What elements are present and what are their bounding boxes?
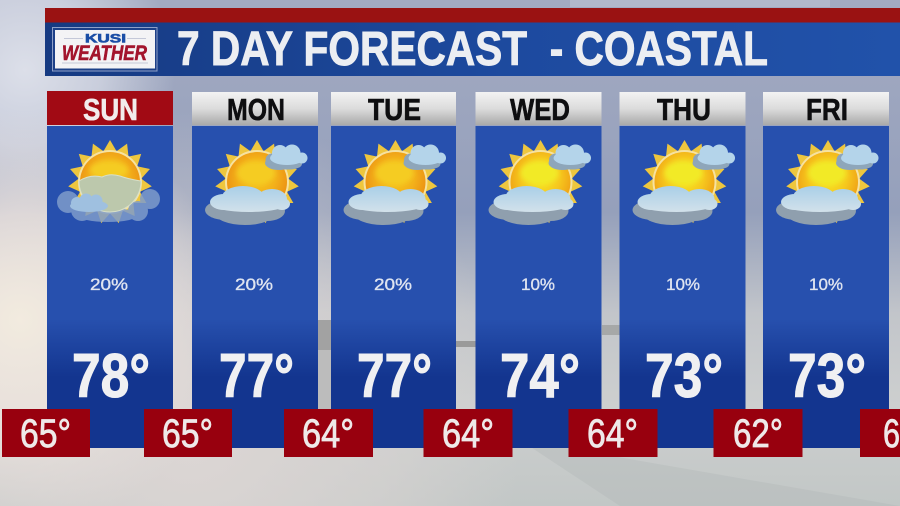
- panel: Friday: FRI: [806, 92, 848, 127]
- precipitation chance: 10%: [521, 275, 555, 294]
- panel: Sunday: [47, 91, 173, 448]
- low temperature: 65: 65°: [162, 412, 213, 456]
- day header: [763, 92, 889, 125]
- low temperature: 65: [144, 409, 232, 457]
- precipitation chance: 10%: [809, 275, 843, 294]
- low temperature: 62: [714, 409, 802, 457]
- day header: [47, 91, 173, 125]
- low temperature: 64: 64°: [587, 412, 638, 456]
- precipitation chance: 10%: [666, 275, 700, 294]
- precipitation chance: 20%: [90, 275, 128, 294]
- logo: KUSI Weather: KUSI: [85, 34, 126, 46]
- low temperature: 62: 62°: [733, 412, 783, 456]
- day header: [192, 92, 318, 125]
- forecast body: [47, 126, 173, 448]
- forecast body: [192, 126, 318, 448]
- title bar: [45, 8, 900, 76]
- low temperature: 64: [424, 409, 512, 457]
- forecast body: [331, 126, 456, 448]
- low temperature: 64: [568, 409, 658, 457]
- low temperature: 64: [284, 409, 373, 457]
- panel: Wednesday: WED: [510, 92, 570, 127]
- icon: sun behind translucent clouds: [57, 140, 160, 225]
- high temperature: 78°: [72, 342, 150, 411]
- low temperature: clipped at edge: [860, 409, 900, 457]
- logo: KUSI Weather: WEATHER: [62, 42, 148, 65]
- precipitation chance: 20%: [235, 275, 273, 294]
- day header: [476, 92, 602, 125]
- day header: [331, 92, 456, 125]
- low temperature: 64: 64°: [442, 412, 494, 456]
- icon: partly cloudy: [205, 140, 308, 225]
- icon: partly cloudy: [344, 140, 446, 225]
- high temperature: 77°: [357, 342, 432, 411]
- blue title band: [45, 22, 900, 76]
- day header: [620, 92, 746, 125]
- icon: partly cloudy: [632, 140, 735, 225]
- panel: Wednesday: [476, 92, 602, 448]
- panel: Tuesday: [331, 92, 456, 448]
- high temperature: 73°: [788, 342, 866, 411]
- panel: Monday: [192, 92, 318, 448]
- title text: 7 DAY FORECAST - COASTAL: [177, 23, 768, 76]
- low temperature: 65: [2, 409, 90, 457]
- low temperature: 65: 65°: [20, 412, 71, 456]
- high temperature: 73°: [645, 342, 723, 411]
- forecast body: [476, 126, 602, 448]
- high temperature: 74°: [500, 342, 580, 411]
- panel: Thursday: THU: [657, 92, 711, 127]
- icon: partly cloudy: [776, 140, 878, 225]
- panel: Thursday: [620, 92, 746, 448]
- panel: Tuesday: TUE: [368, 92, 421, 127]
- logo: KUSI Weather: [52, 28, 157, 71]
- forecast body: [763, 126, 889, 448]
- icon: partly cloudy: [488, 140, 591, 225]
- panel: Friday: [763, 92, 889, 448]
- panel: Sunday: SUN: [83, 92, 138, 127]
- precipitation chance: 20%: [374, 275, 412, 294]
- panel: Monday: MON: [227, 92, 285, 127]
- high temperature: 77°: [219, 342, 294, 411]
- red top stripe: [45, 8, 900, 22]
- low temperature: 64: 64°: [302, 412, 354, 456]
- forecast body: [620, 126, 746, 448]
